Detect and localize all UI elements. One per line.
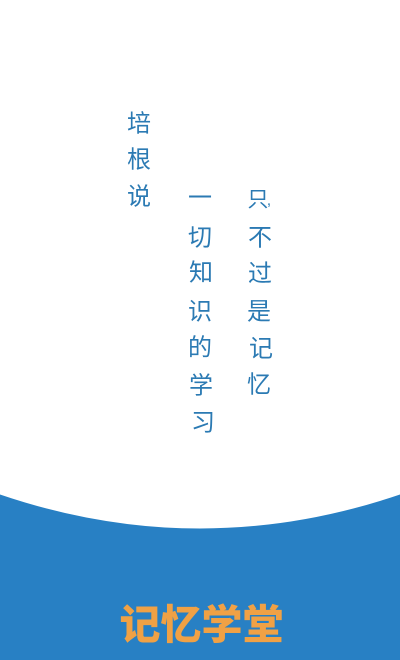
brand title: 记忆学堂	[120, 602, 284, 648]
attribution: 培根说: 根	[127, 146, 151, 174]
brand title: 记忆学堂: 学	[202, 602, 242, 648]
quote column: 一切知识的学习: 知	[189, 260, 213, 286]
brand title: 记忆学堂: 忆	[160, 602, 202, 648]
quote column: 一切知识的学习: 学	[189, 372, 213, 400]
quote column: 只不过是记忆: 是	[247, 298, 271, 326]
quote column: 只不过是记忆: 过	[248, 260, 272, 288]
quote column: 只不过是记忆: ,	[267, 192, 271, 209]
quote column: 只不过是记忆: 不	[248, 224, 272, 252]
brand title: 记忆学堂: 堂	[242, 602, 284, 648]
quote column: 只不过是记忆: 忆	[247, 372, 271, 398]
attribution: 培根说	[127, 110, 151, 210]
quote column: 只不过是记忆: 只	[248, 188, 268, 212]
quote column: 一切知识的学习: 的	[188, 334, 212, 362]
brand title: 记忆学堂: 记	[120, 602, 160, 648]
quote column: 一切知识的学习: 一	[188, 184, 212, 212]
attribution: 培根说: 培	[127, 110, 151, 138]
attribution: 培根说: 说	[127, 184, 151, 210]
blue curved footer panel	[0, 494, 400, 660]
quote column: 一切知识的学习: 切	[188, 224, 212, 252]
quote column: 只不过是记忆	[247, 188, 273, 398]
quote column: 一切知识的学习: 识	[188, 298, 212, 326]
quote column: 只不过是记忆: 记	[249, 336, 273, 362]
quote column: 一切知识的学习	[188, 184, 215, 436]
quote column: 一切知识的学习: 习	[191, 410, 215, 436]
